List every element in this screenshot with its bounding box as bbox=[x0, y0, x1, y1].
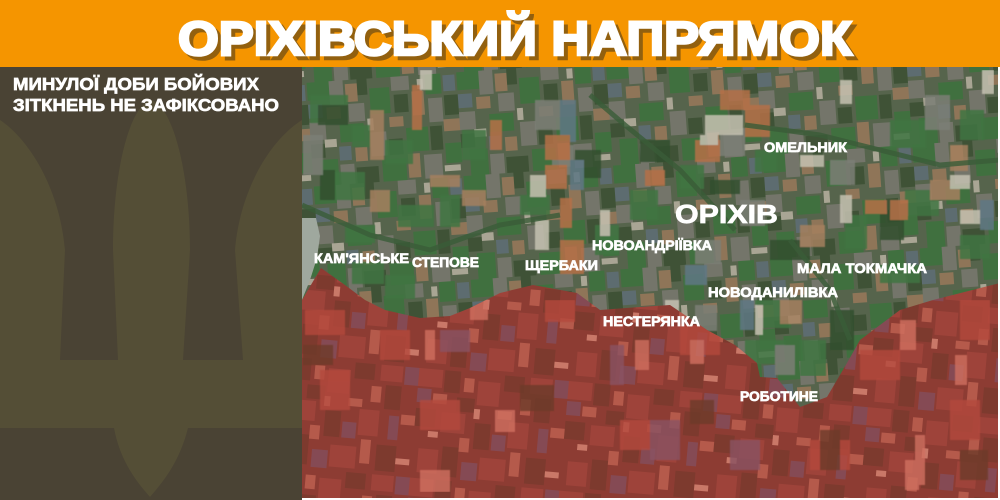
text block: no combat clashes bbox=[13, 73, 279, 115]
red fields bbox=[303, 300, 990, 492]
label: Novodanylivka: НОВОДАНИЛІВКА bbox=[708, 285, 838, 300]
text block: no combat clashes: ЗІТКНЕНЬ НЕ ЗАФІКСОВАНО bbox=[13, 95, 279, 115]
lake bbox=[302, 218, 320, 300]
farm fields bbox=[303, 70, 994, 376]
header banner bbox=[0, 0, 1000, 67]
label: Robotyne: РОБОТИНЕ bbox=[740, 389, 818, 404]
label: Kamianske: КАМ'ЯНСЬКЕ bbox=[314, 251, 409, 266]
text block: no combat clashes: МИНУЛОЇ ДОБИ БОЙОВИХ bbox=[13, 73, 259, 94]
map: satellite fields with occupied zone bbox=[302, 67, 1000, 500]
river tree lines bbox=[302, 93, 998, 310]
title: ОРІХІВСЬКИЙ НАПРЯМОК bbox=[178, 11, 853, 66]
map base bbox=[302, 67, 998, 407]
occupied zone bbox=[302, 260, 1000, 500]
label: Stepove: СТЕПОВЕ bbox=[412, 255, 479, 270]
label: Nesterianka: НЕСТЕРЯНКА bbox=[603, 314, 700, 329]
label: Novoandriivka: НОВОАНДРІЇВКА bbox=[592, 238, 712, 253]
panel: left background bbox=[0, 67, 302, 500]
label: Shcherbaky: ЩЕРБАКИ bbox=[525, 258, 598, 273]
title: ОРІХІВСЬКИЙ НАПРЯМОК bbox=[182, 15, 857, 70]
label: Omelnyk: ОМЕЛЬНИК bbox=[764, 140, 848, 155]
icon: trident emblem bbox=[0, 100, 302, 497]
label: Mala Tokmachka: МАЛА ТОКМАЧКА bbox=[797, 261, 927, 276]
label: Orikhiv: ОРІХІВ bbox=[675, 199, 778, 229]
red base bbox=[302, 260, 1000, 500]
